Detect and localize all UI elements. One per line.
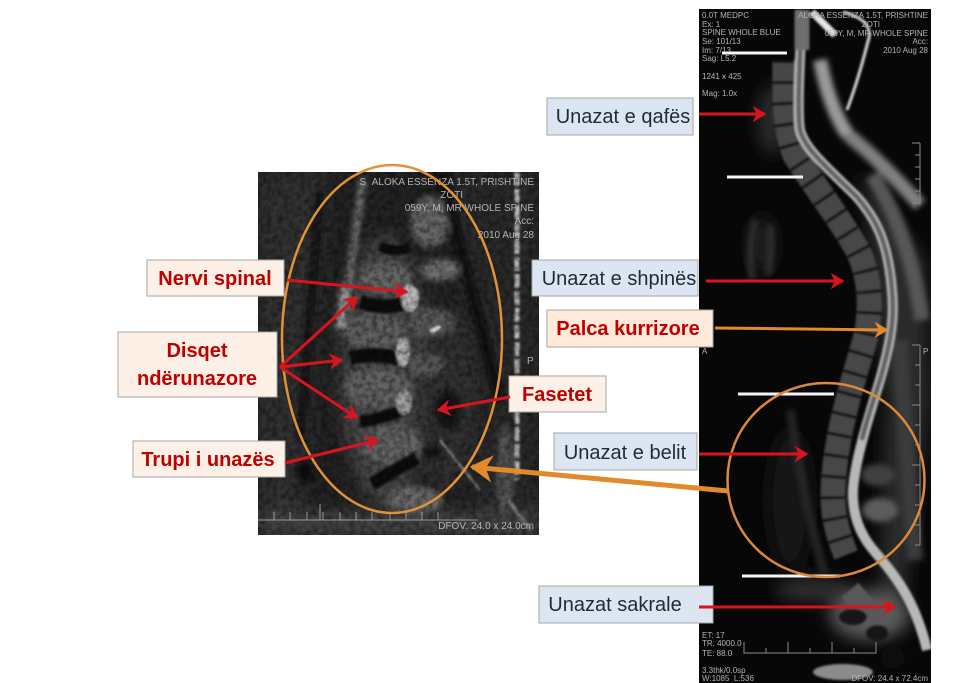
- image annotations: ALOKA ESSENZA 1.5T, PRISHTINE: [798, 11, 928, 20]
- image annotations: Sag: L5.2: [702, 54, 737, 63]
- image annotations: Ex: 1: [702, 20, 721, 29]
- image annotations: DFOV: 24.0 x 24.0cm: [438, 521, 534, 532]
- image annotations: 2010 Aug 28: [478, 230, 534, 241]
- image annotations: 0.0T MEDPC: [702, 11, 749, 20]
- vertebral column: [785, 60, 869, 555]
- ellipse: lumbar region highlight: [282, 165, 502, 513]
- arrows: intervertebral discs: [280, 297, 357, 418]
- arrow: facets: [438, 397, 510, 410]
- arrow: thoracic vertebrae: [706, 280, 843, 282]
- label: Unazat e qafës: [547, 98, 693, 135]
- image annotations: Se: 101/13: [702, 37, 741, 46]
- label: Unazat sakrale: Unazat sakrale: [548, 594, 682, 616]
- scale rulers: [744, 143, 920, 653]
- panel: whole spine MRI image: [699, 9, 931, 683]
- arrow: vertebral body: [285, 440, 378, 463]
- region divider lines: [722, 53, 840, 576]
- image annotations: Acc:: [912, 37, 928, 46]
- image annotations: ZOTI: [440, 190, 463, 201]
- image annotations: A: [702, 347, 708, 356]
- label: Unazat e shpinës: [532, 260, 698, 296]
- arrow: spinal cord: [715, 328, 887, 330]
- label: Nervi spinal: [147, 260, 284, 296]
- image annotations: 3.3thk/0.0sp: [702, 666, 746, 675]
- arrow: lumbar vertebrae: [699, 452, 807, 456]
- spinal canal: [799, 10, 927, 650]
- image annotations: Mag: 1.0x: [702, 89, 737, 98]
- image annotations: P: [527, 356, 534, 367]
- scale ruler: [258, 504, 478, 520]
- label: Unazat sakrale: [539, 586, 713, 623]
- arrow: sacral vertebrae: [699, 606, 895, 608]
- label: Trupi i unazës: [133, 441, 285, 477]
- label: Unazat e shpinës: Unazat e shpinës: [542, 268, 696, 290]
- image annotations: Im: 7/13: [702, 46, 731, 55]
- label: Disqet ndërunazore: ndërunazore: [137, 368, 257, 390]
- arrow: cervical vertebrae: [699, 112, 765, 116]
- circle: lumbar region on whole spine: [728, 383, 924, 577]
- image annotations: P: [923, 347, 928, 356]
- image annotations: TR: 4000.0: [702, 639, 742, 648]
- image annotations: [702, 11, 929, 683]
- image annotations: TE: 88.0: [702, 649, 733, 658]
- image annotations: 059Y, M, MR WHOLE SPINE: [825, 29, 928, 38]
- image annotations: DFOV: 24.4 x 72.4cm: [851, 674, 928, 683]
- image annotations: ZOTI: [862, 20, 880, 29]
- label: Unazat e belit: Unazat e belit: [564, 442, 687, 464]
- arrow: zoom from whole spine to lumbar detail: [472, 467, 728, 491]
- label: Unazat e qafës: Unazat e qafës: [556, 106, 690, 128]
- label: Nervi spinal: Nervi spinal: [158, 268, 272, 290]
- label: Unazat e belit: [554, 433, 697, 470]
- image annotations: W:1085 L:536: [702, 674, 754, 683]
- arrow: spinal nerve: [287, 280, 407, 292]
- image annotations: SPINE WHOLE BLUE: [702, 28, 781, 37]
- label: Fasetet: Fasetet: [522, 384, 592, 406]
- label: Disqet ndërunazore: Disqet: [166, 340, 228, 362]
- image annotations: 2010 Aug 28: [883, 46, 929, 55]
- label: Trupi i unazës: Trupi i unazës: [141, 449, 275, 471]
- panel: lumbar MRI image: [258, 172, 539, 535]
- image annotations: ET: 17: [702, 631, 725, 640]
- label: Disqet ndërunazore: [118, 332, 277, 397]
- image annotations: 1241 x 425: [702, 72, 742, 81]
- label: Palca kurrizore: Palca kurrizore: [556, 318, 700, 340]
- label: Palca kurrizore: [547, 310, 713, 347]
- label: Fasetet: [509, 376, 606, 412]
- image annotations: 059Y, M, MR WHOLE SPINE: [405, 203, 534, 214]
- image annotations: S ALOKA ESSENZA 1.5T, PRISHTINE: [359, 177, 534, 188]
- image annotations: [359, 177, 534, 532]
- image annotations: Acc:: [515, 216, 534, 227]
